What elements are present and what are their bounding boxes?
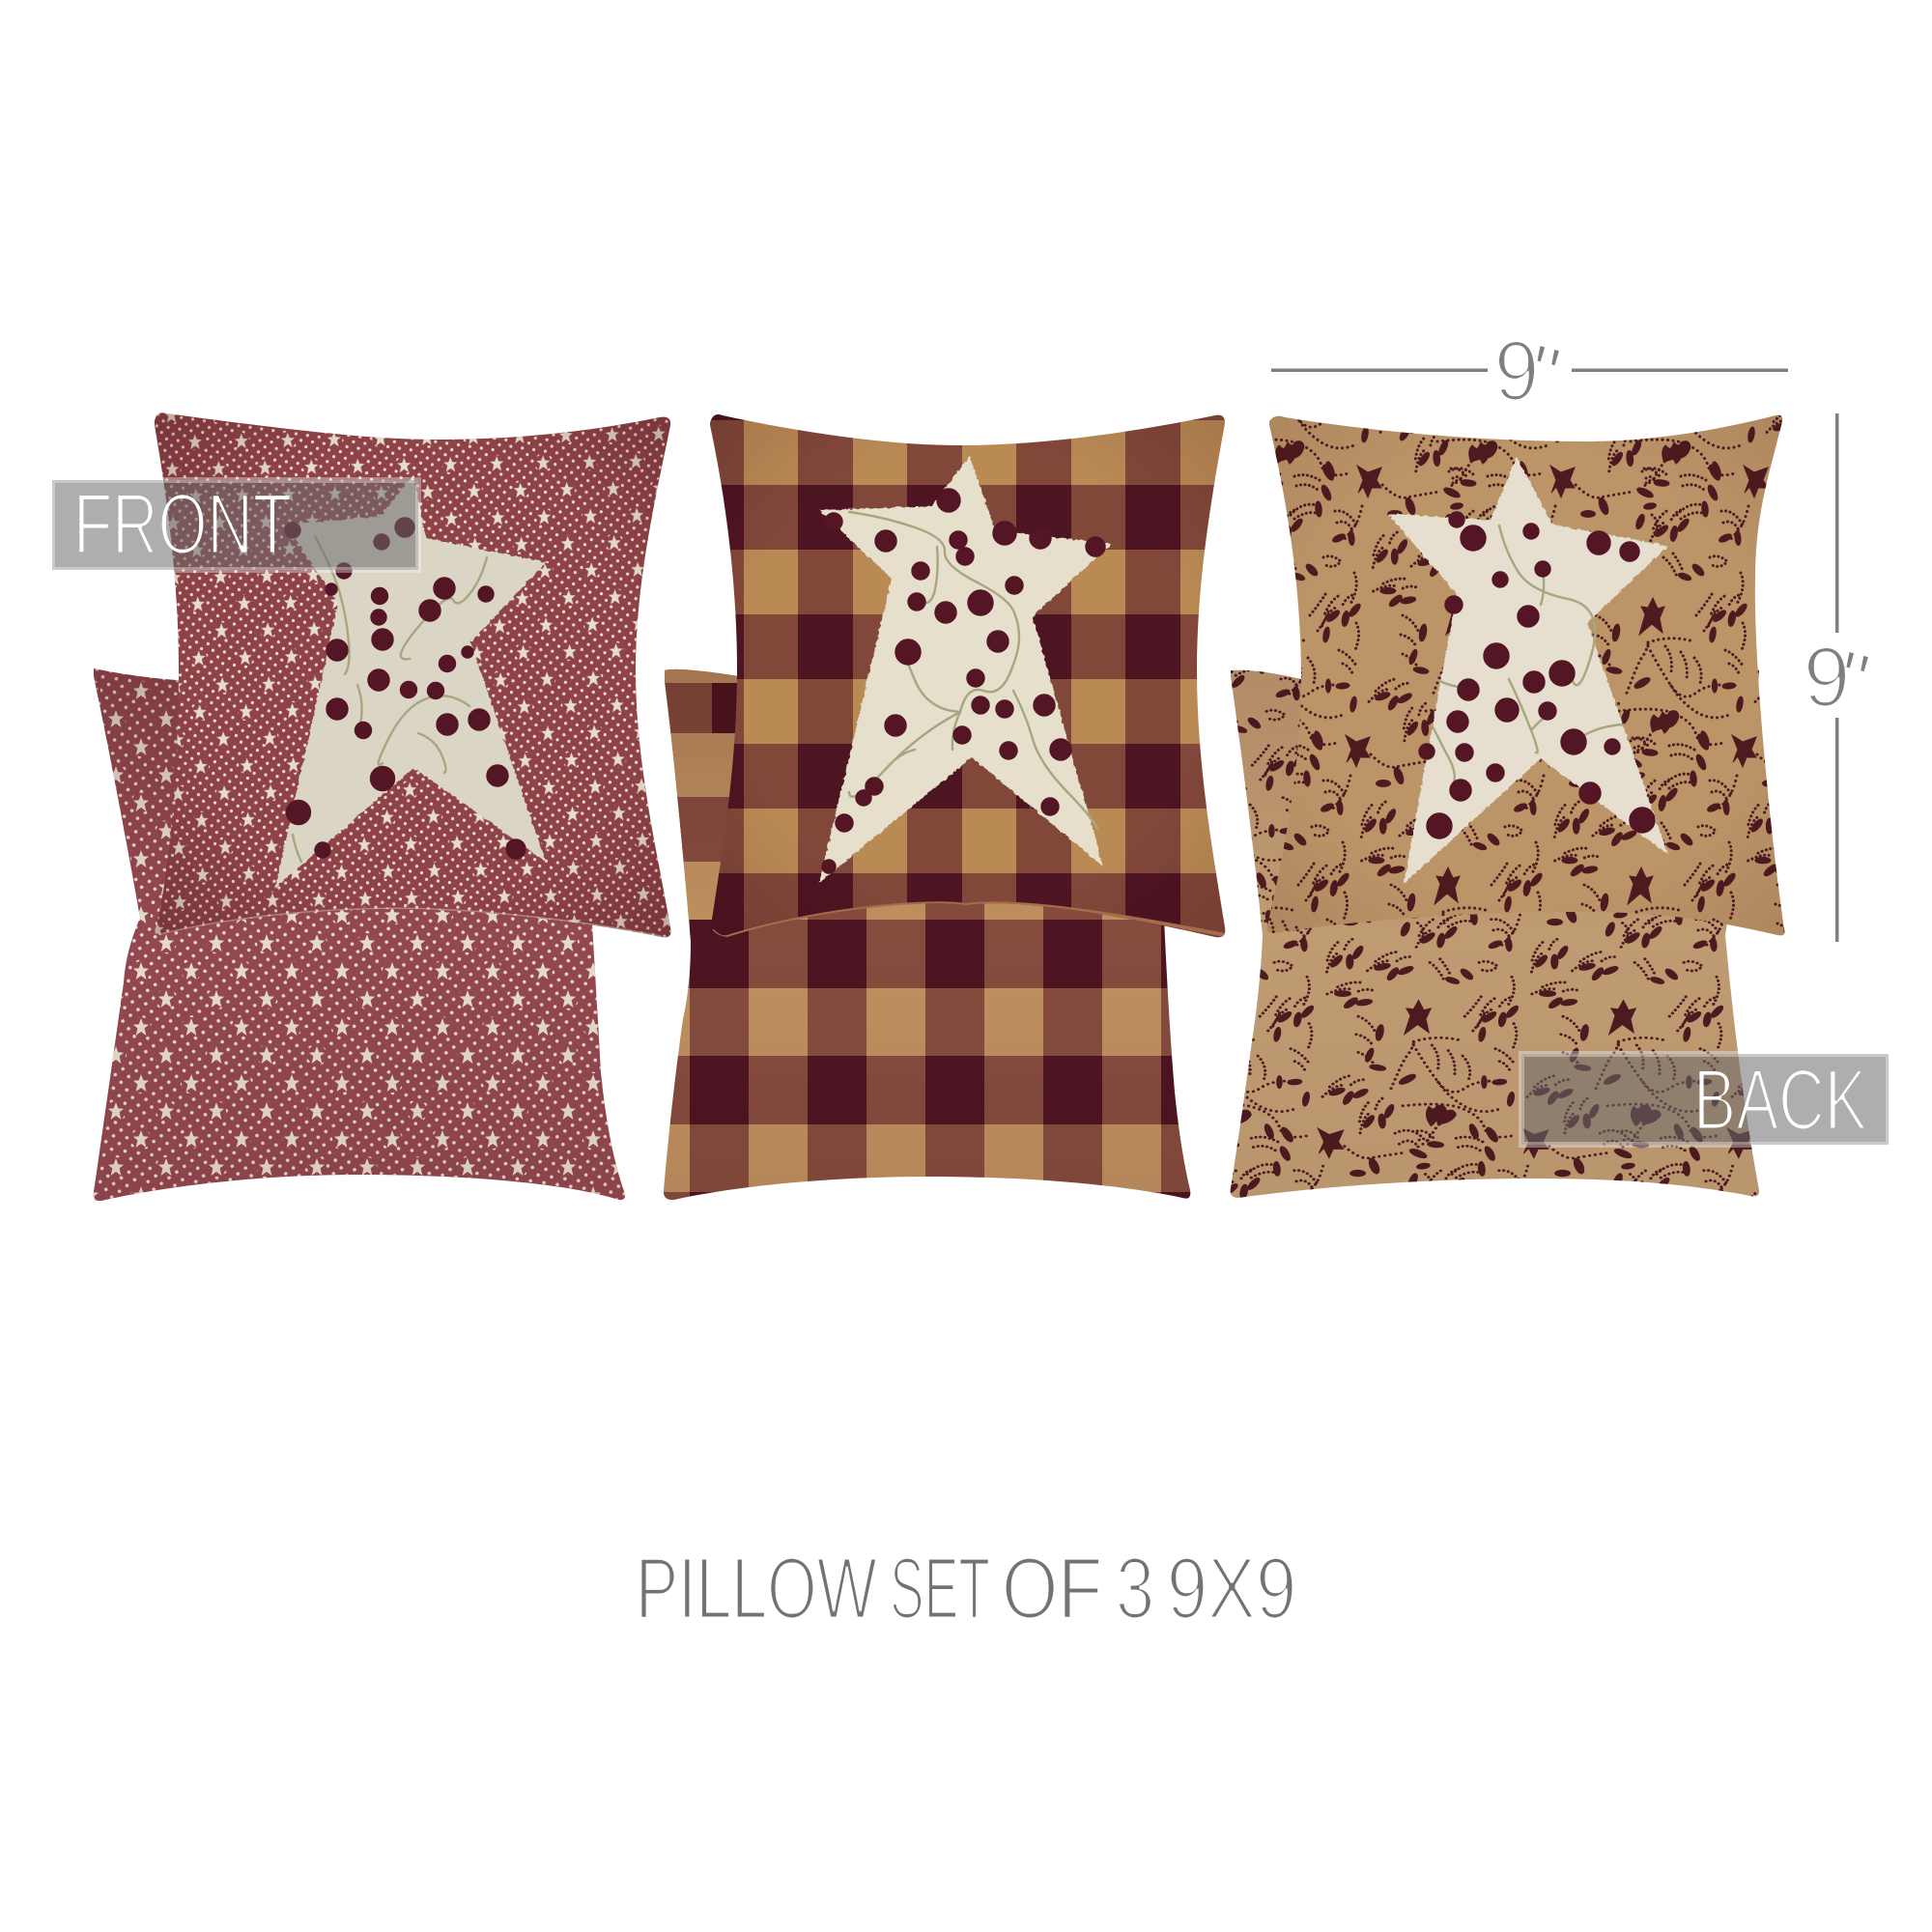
FRONT label: FRONT — [73, 475, 292, 572]
width dimension: 9 inches — [1271, 323, 1788, 425]
cream berry star appliqué on red pillow — [275, 475, 546, 888]
title: PILLOW — [636, 1541, 877, 1637]
back of check pillow — [657, 662, 1198, 1208]
width dimension: 9 inches: " — [1518, 325, 1569, 425]
cream berry star appliqué on check pillow — [819, 456, 1111, 883]
height dimension: 9 inches — [1804, 413, 1878, 942]
BACK label — [1521, 1051, 1889, 1148]
front of tan pillow — [1267, 415, 1785, 935]
front of red pillow — [150, 406, 676, 942]
title: OF — [1002, 1541, 1102, 1637]
cream berry star appliqué on tan pillow — [1388, 457, 1668, 884]
height dimension: 9 inches: " — [1827, 631, 1878, 731]
width dimension: 9 inches: 9 — [1494, 323, 1539, 418]
back of tan pillow — [1231, 669, 1760, 1198]
pillow stack: tan vine print — [1231, 415, 1785, 1198]
title: 9X9 — [1167, 1541, 1296, 1637]
height dimension: 9 inches: 9 — [1804, 629, 1850, 724]
back of red pillow — [87, 657, 638, 1208]
pillow stack: burgundy buffalo check — [657, 411, 1232, 1208]
pillow stack: red star print — [87, 406, 676, 1208]
title: SET — [890, 1541, 989, 1637]
title: 3 — [1116, 1541, 1154, 1637]
front of check pillow — [705, 411, 1232, 942]
BACK label: BACK — [1693, 1051, 1867, 1148]
